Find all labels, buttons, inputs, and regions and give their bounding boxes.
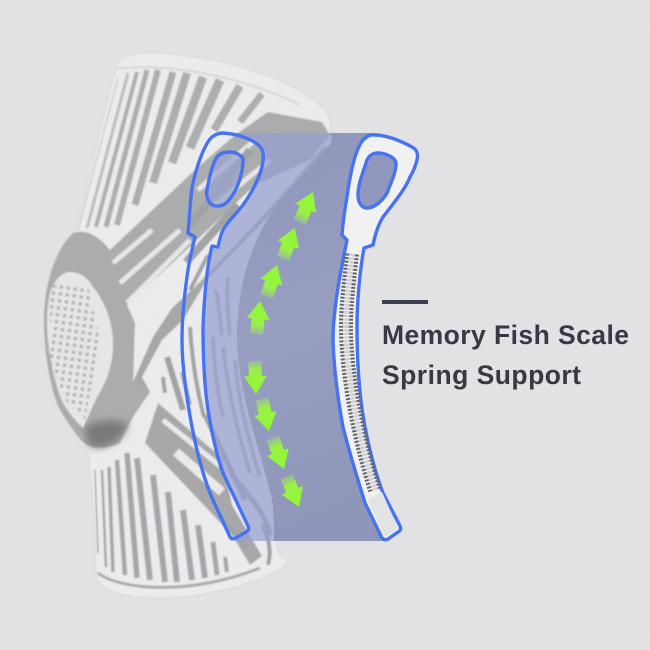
lavender tint bbox=[203, 133, 332, 541]
upper ribs bbox=[78, 70, 262, 230]
arrow down 3 bbox=[262, 434, 295, 473]
translucent panel over knee bbox=[203, 133, 332, 541]
knee sleeve bbox=[44, 53, 331, 598]
strap body bbox=[333, 135, 417, 540]
sleeve silhouette bbox=[44, 53, 331, 598]
left strap outline bbox=[182, 133, 263, 539]
side stripes bbox=[163, 150, 270, 565]
arrow up 2 bbox=[272, 224, 306, 263]
arrow up 4 bbox=[245, 300, 271, 335]
spring coil bbox=[346, 254, 375, 490]
strap foot shading bbox=[368, 492, 398, 538]
arrow up 1 bbox=[289, 187, 324, 227]
right strap bbox=[333, 135, 417, 540]
lower diagonal wedge bbox=[145, 403, 262, 565]
arrows: downward bbox=[243, 361, 310, 511]
kneecap pad bbox=[47, 272, 113, 428]
kneecap dot pattern bbox=[50, 285, 100, 420]
heading bbox=[382, 320, 629, 390]
branch band bbox=[133, 145, 330, 392]
heading: Spring Support bbox=[382, 360, 581, 390]
muted stripes under tint bbox=[213, 278, 260, 477]
arrow down 4 bbox=[276, 472, 310, 511]
top cuff line bbox=[117, 67, 300, 105]
left strap hole bbox=[207, 152, 243, 206]
heading: Memory Fish Scale bbox=[382, 320, 629, 350]
arrow down 1 bbox=[243, 361, 267, 394]
lower ribs bbox=[95, 453, 227, 582]
panel: deep blue backdrop bbox=[237, 133, 385, 541]
accent bar bbox=[382, 300, 428, 304]
right strap hole bbox=[358, 153, 396, 208]
arrows: upward bbox=[245, 187, 324, 335]
kneecap shadow bbox=[84, 421, 128, 448]
bottom cuff line bbox=[98, 568, 260, 587]
arrow up 3 bbox=[256, 261, 288, 300]
white band stripes bbox=[113, 140, 270, 303]
arrow down 2 bbox=[251, 396, 280, 433]
upper diagonal band joined to kneecap ring bbox=[44, 112, 330, 448]
